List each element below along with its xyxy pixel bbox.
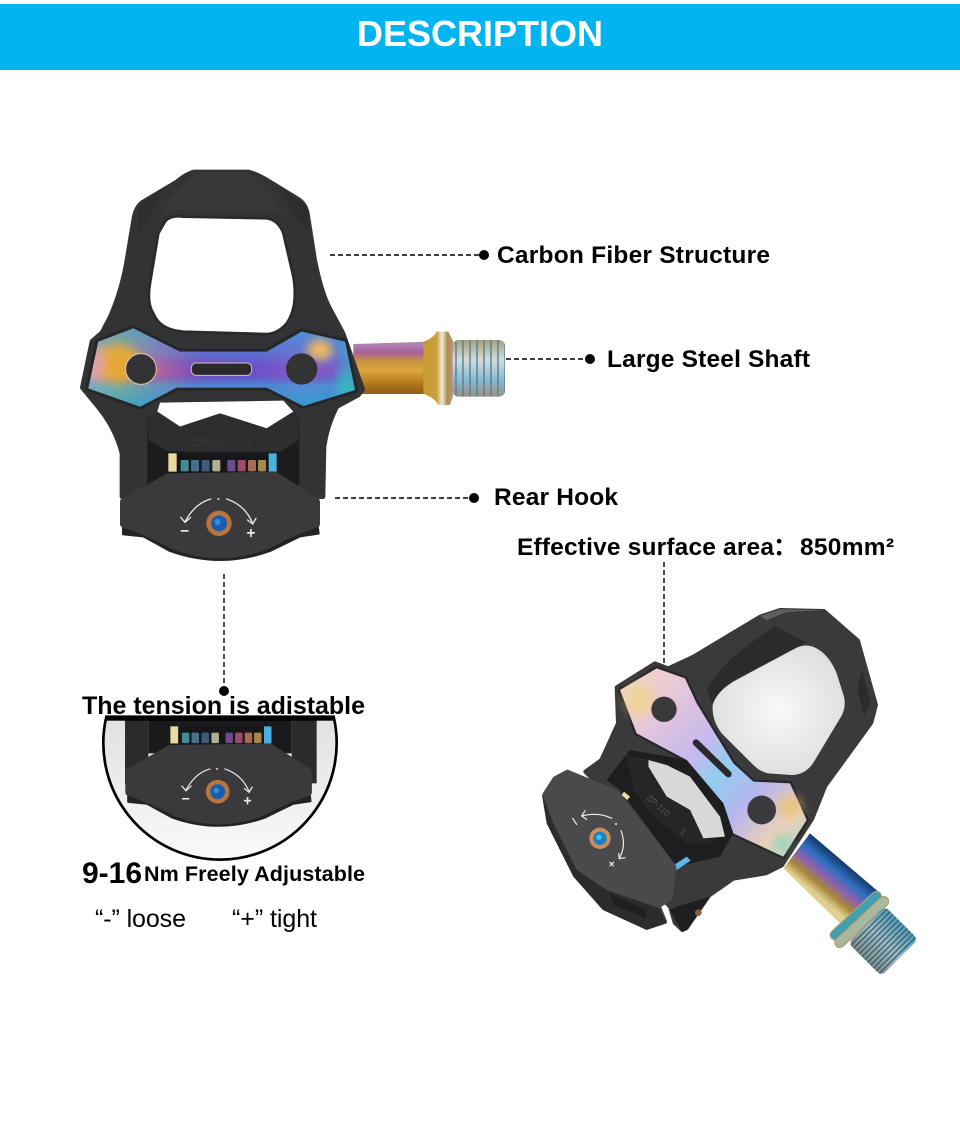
- callout: effective surface area: ：: [773, 534, 798, 561]
- pedal photo: angled view: [542, 609, 918, 976]
- iridescent cleat plate: [88, 328, 355, 407]
- callout: effective surface area: 850mm²: [800, 534, 894, 561]
- callout: effective surface area: [517, 534, 894, 664]
- adjustment range: [82, 857, 365, 890]
- carbon frame: [585, 610, 876, 930]
- adjustment screw: [206, 511, 232, 536]
- frame window: [713, 645, 845, 775]
- magnified hook: [125, 717, 317, 826]
- rear hook: −: [180, 523, 189, 540]
- pedal photo: top view: [82, 172, 505, 560]
- callout: large steel shaft: Large Steel Shaft: [607, 346, 810, 373]
- rear gap: [607, 750, 733, 870]
- rear hook: [123, 453, 318, 560]
- tension scale: [573, 811, 625, 859]
- callout: rear hook: [335, 484, 618, 511]
- adjustment range: 9-16: [82, 857, 142, 890]
- iridescent cleat plate: [620, 668, 807, 857]
- plate bolts and slot: [651, 697, 776, 824]
- callout: effective surface area: Effective surface area: [517, 534, 774, 561]
- connector to tension detail: [219, 574, 229, 696]
- cleat teeth: [168, 453, 277, 473]
- banner title: DESCRIPTION: [357, 13, 603, 54]
- rear hook: [542, 772, 710, 932]
- model mark: ZP-110: [645, 792, 672, 819]
- tension scale: [181, 499, 256, 524]
- rear hook: ×: [609, 859, 615, 870]
- callout: carbon fiber structure: Carbon Fiber Structure: [497, 242, 770, 269]
- carbon frame: [82, 172, 363, 497]
- model mark: ZP-110: [192, 437, 228, 449]
- adjustment range: Nm Freely Adjustable: [144, 862, 365, 886]
- frame facets: [138, 172, 308, 235]
- loose and tight legend: “+” tight: [232, 905, 317, 933]
- callout: carbon fiber structure: [330, 242, 770, 269]
- tension heading: The tension is adistable: [82, 692, 365, 720]
- shaft: [783, 833, 918, 976]
- loose and tight legend: [95, 905, 317, 933]
- rear hook: +: [247, 525, 256, 542]
- tension detail inset: [103, 716, 337, 860]
- adjustment screw: [589, 828, 611, 849]
- callout: rear hook: Rear Hook: [494, 484, 618, 511]
- rear gap: L: [679, 827, 689, 837]
- callout: large steel shaft: [506, 346, 810, 373]
- loose and tight legend: “-” loose: [95, 905, 186, 933]
- header banner: [0, 4, 960, 70]
- rear gap and hook base: L: [247, 437, 253, 449]
- plate bolts and slot: [126, 353, 317, 385]
- frame window: [149, 216, 295, 334]
- shaft: [353, 332, 505, 405]
- rear gap and hook base: [147, 401, 299, 485]
- frame shading: [707, 609, 871, 716]
